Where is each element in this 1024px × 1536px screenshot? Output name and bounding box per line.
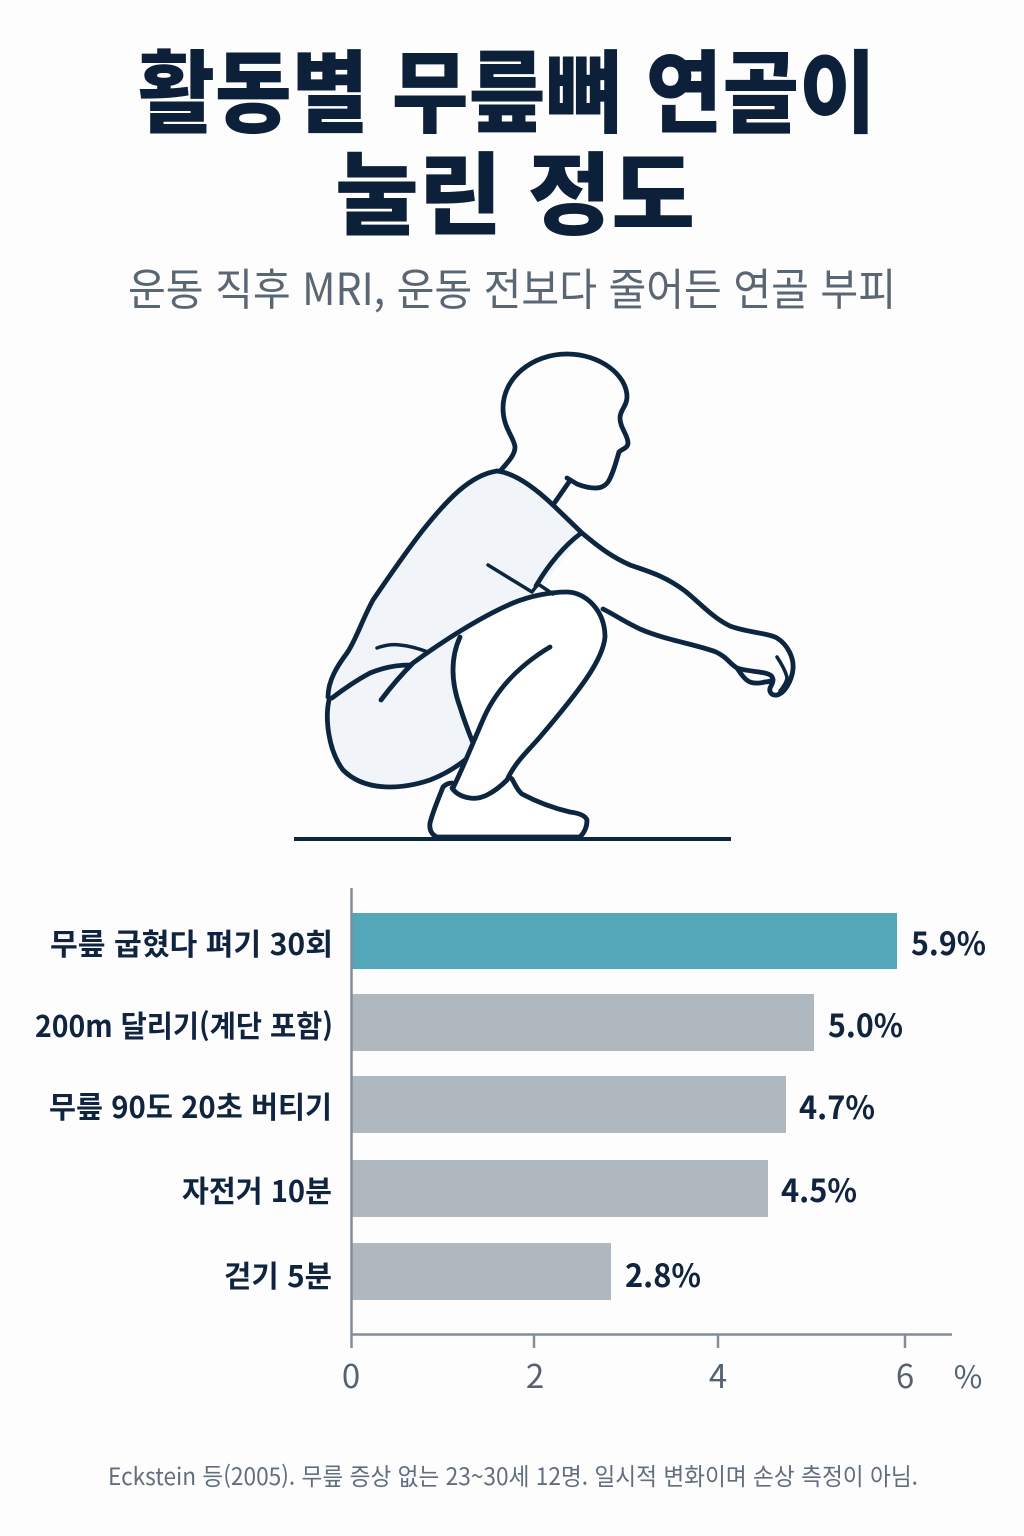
bar: 무릎 굽혔다 펴기 30회 5.9%: 5.9% bbox=[911, 919, 986, 965]
ground line bbox=[294, 837, 731, 841]
bar: 걷기 5분 2.8%: 걷기 5분 bbox=[224, 1252, 332, 1296]
waistband line bbox=[332, 665, 410, 698]
head bbox=[501, 354, 628, 488]
bar: 걷기 5분 2.8%: 2.8% bbox=[625, 1251, 701, 1297]
thigh bbox=[381, 592, 605, 780]
bar: 자전거 10분 4.5%: 4.5% bbox=[781, 1166, 857, 1212]
bar: 무릎 굽혔다 펴기 30회 5.9% bbox=[50, 913, 986, 969]
bar: 200m 달리기 5.0% bbox=[35, 994, 903, 1051]
hand: thumb bbox=[737, 668, 773, 683]
bar chart bbox=[35, 888, 986, 1398]
title: 눌린 정도 bbox=[335, 123, 695, 253]
bar: 자전거 10분 4.5%: 자전거 10분 bbox=[182, 1167, 332, 1211]
bar: 무릎 90도 20초 버티기 4.7%: 무릎 90도 20초 버티기 bbox=[49, 1083, 332, 1127]
sleeve hem bbox=[488, 565, 553, 594]
calf bbox=[453, 647, 550, 788]
foot bbox=[430, 778, 587, 837]
axis labels bbox=[342, 1350, 982, 1398]
subtitle: 운동 직후 MRI, 운동 전보다 줄어든 연골 부피 bbox=[128, 254, 896, 318]
butt and shorts bbox=[327, 700, 465, 787]
bar: 자전거 10분 4.5% bbox=[182, 1160, 857, 1217]
axis labels: 0 bbox=[342, 1350, 360, 1398]
footnote: Eckstein 등(2005). 무릎 증상 없는 23~30세 12명. 일시적 변화이며 손상 측정이 아님. bbox=[108, 1457, 918, 1492]
neck front bbox=[553, 482, 569, 505]
axis labels: 2 bbox=[526, 1350, 544, 1398]
title bbox=[138, 21, 876, 253]
hand: finger bbox=[777, 657, 787, 691]
sleeve bbox=[536, 534, 580, 586]
leg fill bbox=[453, 592, 605, 788]
title: 활동별 무릎뼈 연골이 bbox=[138, 21, 876, 151]
bar: 무릎 90도 20초 버티기 4.7% bbox=[49, 1076, 875, 1133]
axis labels: 4 bbox=[709, 1350, 727, 1398]
torso back bbox=[328, 471, 497, 697]
shoulder and upper arm bbox=[497, 471, 793, 695]
axis labels: % bbox=[954, 1352, 982, 1397]
bar: 걷기 5분 2.8% bbox=[224, 1243, 701, 1300]
body fill: shirt and shorts bbox=[327, 471, 582, 787]
axes bbox=[351, 888, 952, 1348]
bar: 200m 달리기 5.0%: 5.0% bbox=[828, 1001, 903, 1047]
illustration: squatting figure bbox=[327, 354, 793, 837]
bar: 무릎 굽혔다 펴기 30회 5.9%: 무릎 굽혔다 펴기 30회 bbox=[50, 920, 333, 964]
bar: 무릎 90도 20초 버티기 4.7%: 4.7% bbox=[799, 1083, 875, 1129]
bar: 200m 달리기 5.0%: 200m 달리기(계단 포함) bbox=[35, 1002, 333, 1046]
waist detail bbox=[377, 645, 428, 652]
shorts inner edge bbox=[453, 637, 473, 743]
axis labels: 6 bbox=[896, 1350, 914, 1398]
